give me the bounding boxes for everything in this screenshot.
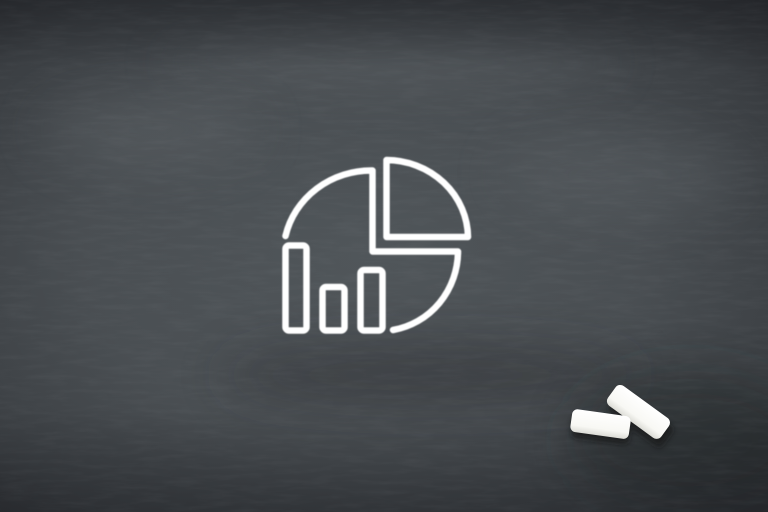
chalk: left piece [570, 409, 631, 440]
icon: tall bar [286, 246, 306, 330]
icon: short bar [322, 287, 344, 330]
icon: medium bar [360, 270, 382, 330]
chalk shadow [571, 390, 675, 449]
icon: detached pie slice [386, 160, 468, 237]
icon: main pie outline [286, 170, 458, 330]
illustration: two pieces of chalk [570, 383, 675, 449]
chalk: right piece [605, 383, 672, 441]
icon: pie chart with bar chart [286, 160, 468, 330]
